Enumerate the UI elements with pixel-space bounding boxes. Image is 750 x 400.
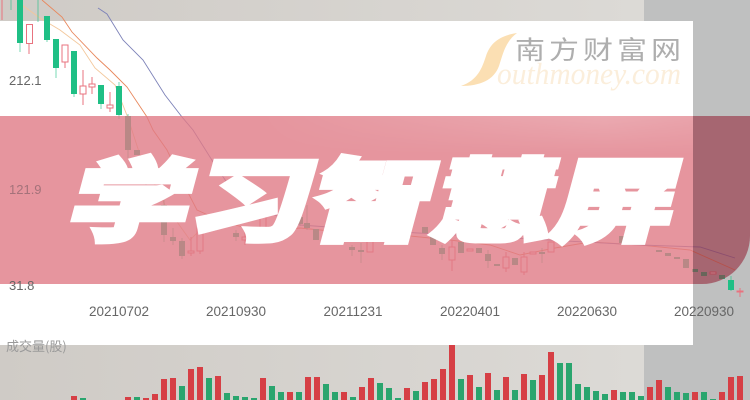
- candlestick chart: [2, 0, 743, 297]
- moving average: light orange: [22, 5, 225, 240]
- background panel: right grey: [644, 0, 750, 400]
- logo chinese name: 南方财富网: [515, 31, 681, 67]
- band highlight: [400, 116, 693, 139]
- axis label: 31.8: 31.8: [9, 278, 34, 293]
- title band: dark right end: [693, 116, 750, 284]
- moving average: orange: [42, 0, 735, 270]
- title text: 学习智慧屏: [57, 129, 697, 261]
- axis label: 121.9: 121.9: [9, 182, 42, 197]
- date axis labels: 20211231: [323, 304, 383, 319]
- date axis labels: 20210930: [206, 304, 266, 319]
- date axis labels: 20220630: [557, 304, 617, 319]
- title band: pink: [0, 116, 693, 284]
- white chart panel: [0, 21, 693, 345]
- date axis labels: 20220401: [440, 304, 500, 319]
- logo latin name: outhmoney.com: [497, 56, 681, 91]
- logo swoosh: [461, 33, 517, 86]
- date axis labels: 20220930: [674, 304, 734, 319]
- axis label: 212.1: 212.1: [9, 73, 42, 88]
- logo: southmoney watermark: [461, 31, 681, 91]
- moving average: purple: [98, 8, 735, 258]
- volume label: 成交量(股): [6, 336, 67, 355]
- date axis labels: 20210702: [89, 304, 149, 319]
- volume bars: [71, 345, 743, 400]
- date axis labels: [89, 304, 734, 319]
